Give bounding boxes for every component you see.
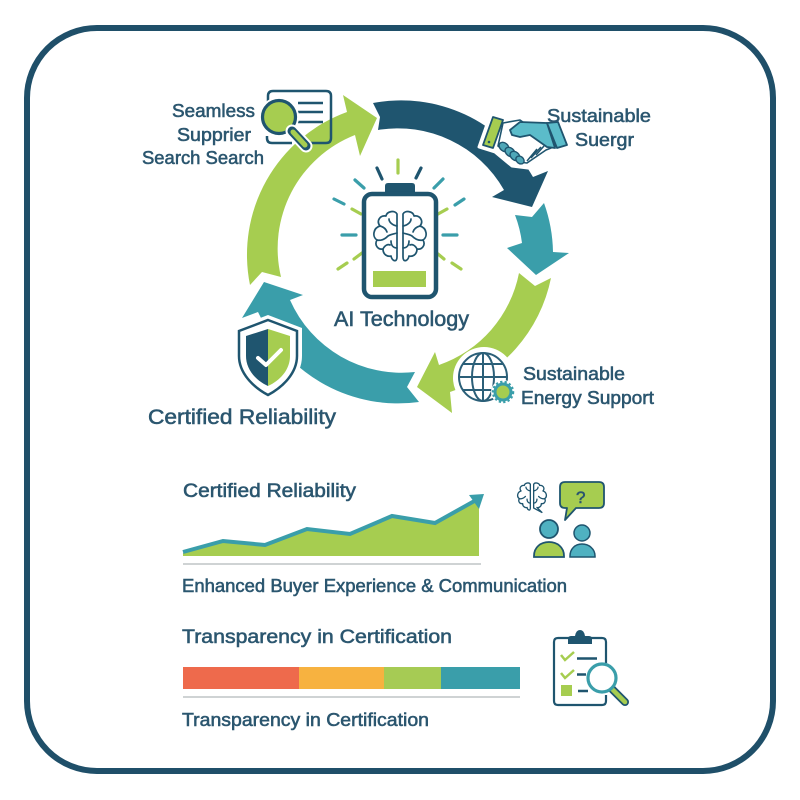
label: Sustainable Suergr: Suergr (575, 129, 634, 150)
area chart (183, 494, 484, 565)
icon: clipboard with magnifier (554, 630, 625, 705)
label: Seamless Supprier Search (142, 101, 264, 168)
icon: battery with brain (334, 160, 464, 297)
heading: Transparency in Certification: Transparency in Certification (182, 626, 452, 648)
label: Transparency in Certification: Transparency in Certification (182, 710, 429, 730)
label: Seamless Supprier Search: Supprier (177, 125, 251, 145)
arrow: dark top-right (373, 100, 548, 207)
battery cap (385, 183, 415, 194)
label: Enhanced Buyer Experience: Enhanced Buyer Experience & Communication (182, 576, 567, 596)
icon: people with brain and question bubble: ? (576, 488, 585, 507)
heading: chart Certified Reliability: Certified Reliability (183, 481, 357, 502)
battery charge level (373, 271, 426, 287)
battery rays (334, 160, 464, 269)
label: Seamless Supprier Search: Search Search (142, 148, 264, 168)
arrow: green top-left (247, 95, 377, 285)
label: Certified Reliability: Certified Reliability (148, 406, 337, 429)
label: Sustainable Suergr: Sustainable (547, 105, 651, 126)
battery body (364, 194, 436, 297)
label: Sustainable Suergr (547, 105, 651, 150)
icon: shield with check (234, 315, 302, 400)
arrow: teal right (507, 203, 569, 275)
label: Sustainable Energy Support (521, 364, 654, 408)
stacked color bar (183, 667, 520, 698)
arrow: green lower-right (417, 273, 551, 413)
icon: document with magnifier (259, 91, 331, 146)
icon: globe with gear (453, 347, 515, 409)
arrow: teal lower-left (242, 282, 419, 403)
label: Sustainable Energy Support: Sustainable (523, 364, 625, 384)
brain (374, 212, 426, 261)
label: Sustainable Energy Support: Energy Support (521, 388, 654, 408)
icon: handshake (479, 113, 571, 168)
label: Seamless Supprier Search: Seamless (172, 101, 255, 121)
label: AI Technology: AI Technology (334, 308, 470, 331)
icon: people with brain and question bubble (518, 482, 604, 557)
